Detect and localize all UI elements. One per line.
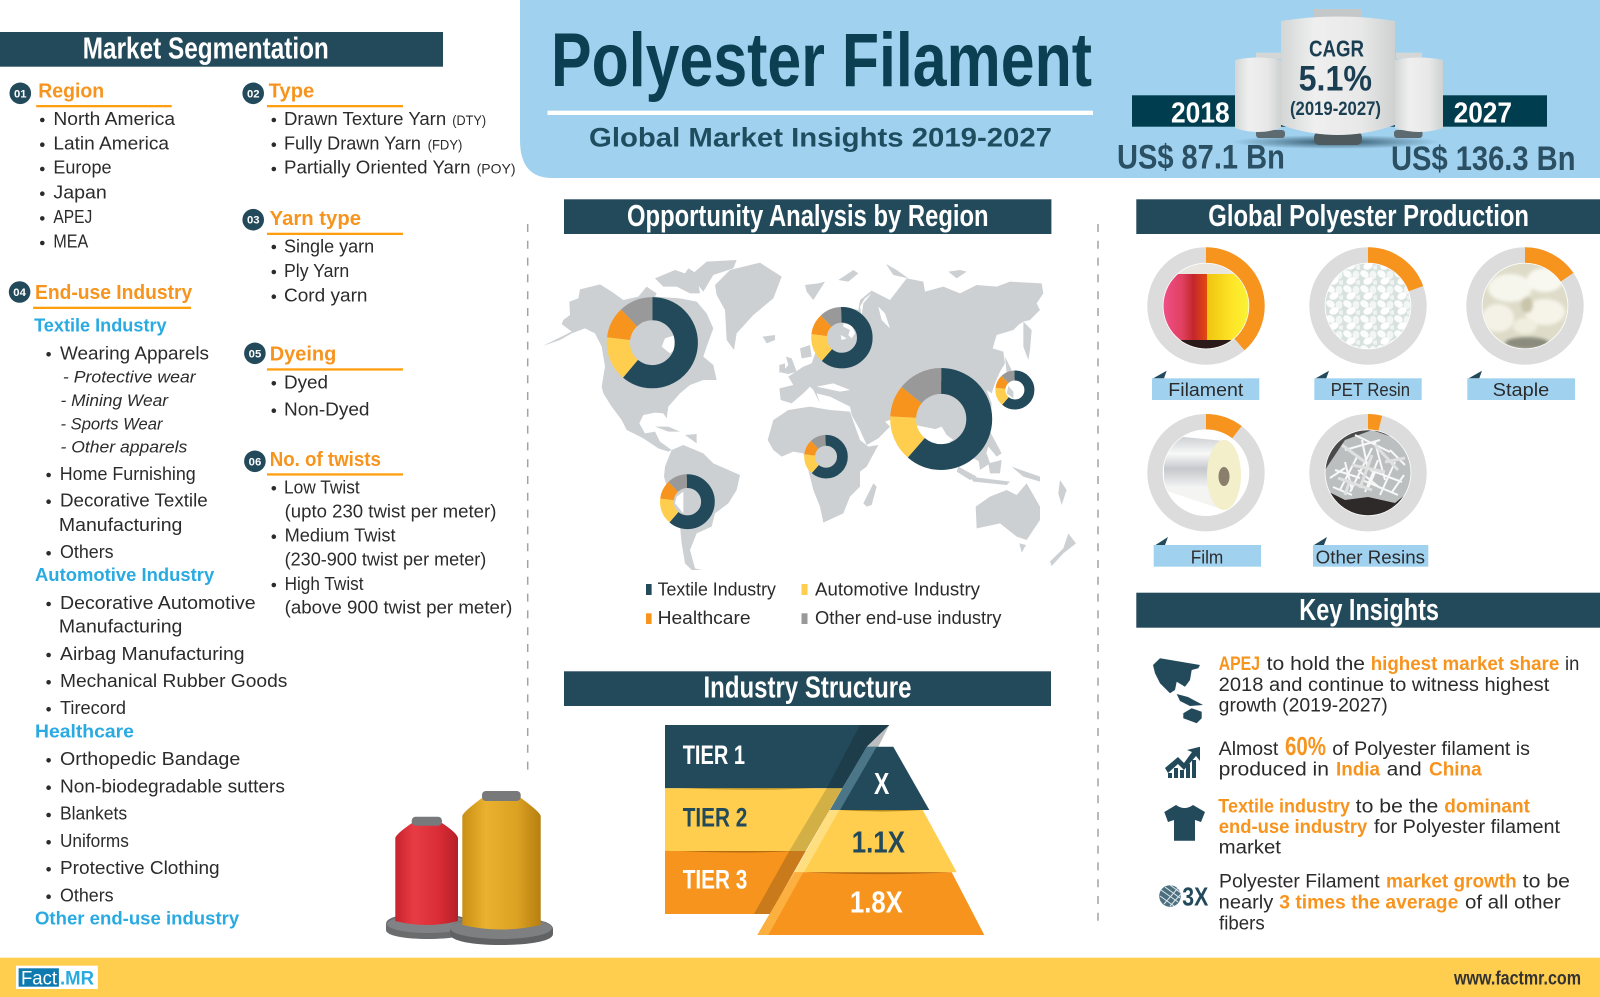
tier pyramid: 1.8X	[850, 884, 903, 919]
logo: Fact.MR: Fact	[21, 968, 58, 990]
segment 04: end-use industry: Non-biodegradable sutters	[60, 776, 285, 796]
segment 04: end-use industry: Tirecord	[60, 698, 126, 718]
segment 04: end-use industry: Blankets	[60, 804, 127, 824]
logo: Fact.MR	[16, 966, 98, 990]
tier pyramid: TIER 1	[683, 740, 745, 770]
insight: India and China production: produced in	[1219, 759, 1329, 780]
insight: India and China production: India	[1336, 759, 1380, 780]
insight: India and China production: and	[1387, 759, 1422, 780]
white yarn spools with CAGR: 5.1%	[1299, 60, 1372, 99]
insight: India and China production: of Polyester filament is	[1332, 739, 1530, 760]
segment 02: type	[242, 80, 516, 178]
heading: key insights	[1136, 592, 1600, 628]
insight: India and China production: Almost	[1219, 739, 1279, 760]
segment 03: yarn type: Yarn type	[270, 208, 361, 230]
segment 04: end-use industry: - Sports Wear	[60, 415, 164, 433]
segment 05: dyeing	[244, 342, 403, 420]
segment 02: type: Fully Drawn Yarn	[284, 134, 421, 154]
segment 05: dyeing: Dyeing	[270, 344, 336, 366]
insight: 3X market growth: to be	[1523, 872, 1570, 893]
icon: growth chart	[1165, 747, 1200, 778]
donut: APEJ	[903, 381, 979, 457]
insight: textile end use: to be the	[1356, 796, 1438, 817]
segment 01: region: 01	[14, 88, 27, 100]
segment 06: number of twists: (above 900 twist per meter)	[285, 597, 512, 617]
segment 01: region: Europe	[53, 158, 112, 178]
map legend: Automotive Industry	[815, 580, 980, 600]
footer band	[0, 958, 1600, 997]
segment 05: dyeing: Dyed	[284, 372, 328, 392]
white yarn spools with CAGR: CAGR	[1309, 36, 1364, 62]
segment 04: end-use industry: - Protective wear	[63, 369, 197, 387]
segment 04: end-use industry: Uniforms	[60, 831, 129, 851]
insight: 3X market growth: market growth	[1386, 872, 1517, 893]
map legend: Healthcare	[658, 608, 751, 628]
segment 04: end-use industry	[9, 281, 287, 929]
insight: textile end use: Textile industry	[1218, 796, 1350, 817]
segment 04: end-use industry: Manufacturing	[59, 515, 182, 535]
segment 04: end-use industry: Healthcare	[35, 720, 134, 741]
segment 05: dyeing: 05	[249, 348, 261, 360]
insight: 3X market growth: Polyester Filament	[1219, 872, 1380, 893]
insight: APEJ market share: 2018 and continue to witness highest	[1219, 675, 1550, 696]
donut: Europe	[819, 315, 865, 361]
panel: market segmentation heading: Market Segmentation	[83, 30, 329, 65]
insight: 3X market growth	[1159, 872, 1570, 934]
segment 06: number of twists: Low Twist	[284, 477, 360, 497]
segment 01: region: APEJ	[53, 207, 92, 227]
segment 02: type: Partially Oriented Yarn	[284, 158, 471, 178]
website url: www.factmr.com	[1453, 968, 1581, 989]
segment 04: end-use industry: 04	[13, 287, 27, 299]
icon: yarn ball with 3X	[1159, 882, 1209, 912]
segment 01: region: MEA	[53, 232, 88, 252]
segment 04: end-use industry: Others	[60, 542, 114, 562]
insight: APEJ market share: in	[1565, 654, 1579, 675]
insight: 3X market growth: of all other	[1465, 893, 1561, 914]
insight: textile end use	[1164, 796, 1561, 859]
segment 02: type: (FDY)	[428, 137, 462, 153]
heading: industry structure: Industry Structure	[704, 670, 912, 705]
insight: India and China production: 60%	[1285, 731, 1326, 761]
segment 01: region: North America	[53, 109, 176, 129]
insight: textile end use: market	[1219, 838, 1282, 859]
donut: Japan	[1000, 376, 1029, 404]
segment 01: region: Latin America	[53, 134, 170, 154]
world map with regional donuts	[543, 260, 1076, 570]
icon: yarn ball with 3X: 3X	[1182, 882, 1209, 912]
donut: Middle East and Africa	[810, 440, 842, 473]
segment 01: region: Region	[38, 80, 104, 102]
insight: textile end use: end-use industry	[1219, 817, 1368, 838]
icon: t-shirt	[1164, 805, 1205, 841]
segment 02: type: 02	[247, 88, 260, 100]
production ring: film	[1154, 422, 1261, 567]
production ring: other resins	[1313, 422, 1428, 567]
heading: industry structure	[564, 670, 1051, 706]
insight: India and China production	[1165, 731, 1530, 780]
segment 03: yarn type: Cord yarn	[284, 286, 368, 306]
production ring: filament	[1152, 255, 1259, 400]
year ribbon	[1132, 95, 1547, 129]
segment 06: number of twists: Medium Twist	[285, 526, 396, 546]
map legend: Other end-use industry	[815, 608, 1001, 628]
segment 03: yarn type	[242, 208, 403, 306]
segment 04: end-use industry: Decorative Automotive	[60, 593, 256, 613]
tier pyramid	[665, 725, 984, 935]
segment 03: yarn type: Ply Yarn	[284, 261, 349, 281]
panel: market segmentation heading	[0, 30, 443, 67]
market value 2018: US$ 87.1 Bn	[1117, 138, 1285, 176]
insight: 3X market growth: fibers	[1219, 913, 1265, 934]
insight: APEJ market share	[1153, 654, 1579, 723]
insight: APEJ market share: highest market share	[1371, 654, 1559, 675]
segment 04: end-use industry: Other end-use industry	[35, 908, 240, 929]
segment 04: end-use industry: Manufacturing	[59, 617, 182, 637]
segment 02: type: Type	[269, 80, 314, 102]
segment 03: yarn type: Single yarn	[284, 236, 374, 256]
segment 04: end-use industry: Decorative Textile	[60, 491, 208, 511]
segment 04: end-use industry: Airbag Manufacturing	[60, 644, 245, 664]
year ribbon: 2018	[1171, 97, 1230, 129]
segment 03: yarn type: 03	[247, 215, 260, 227]
map legend: Textile Industry	[658, 580, 776, 600]
white yarn spools with CAGR: (2019-2027)	[1290, 99, 1381, 120]
tier pyramid: 1.1X	[852, 825, 905, 860]
segment 05: dyeing: Non-Dyed	[284, 400, 370, 420]
segment 02: type: (POY)	[477, 161, 516, 177]
segment 01: region	[9, 80, 176, 252]
segment 04: end-use industry: Orthopedic Bandage	[60, 749, 240, 769]
icon: thread spools	[386, 791, 553, 945]
insight: textile end use: for Polyester filament	[1374, 817, 1561, 838]
tier pyramid: TIER 3	[683, 864, 747, 894]
insight: APEJ market share: APEJ	[1219, 654, 1260, 675]
segment 04: end-use industry: Mechanical Rubber Goods	[60, 671, 287, 691]
heading: key insights: Key Insights	[1299, 592, 1439, 627]
insight: APEJ market share: growth (2019-2027)	[1219, 696, 1388, 717]
segment 04: end-use industry: - Other apparels	[60, 439, 187, 457]
production ring: filament: Filament	[1168, 379, 1243, 400]
market value 2027: US$ 136.3 Bn	[1391, 140, 1576, 178]
segment 04: end-use industry: - Mining Wear	[60, 392, 170, 410]
segment 02: type: (DTY)	[452, 112, 486, 128]
header band	[520, 0, 1600, 178]
segment 06: number of twists: High Twist	[285, 574, 364, 594]
heading: opportunity analysis: Opportunity Analysis by Region	[627, 198, 989, 233]
segment 06: number of twists: (upto 230 twist per meter)	[285, 501, 496, 521]
insight: 3X market growth: nearly	[1219, 893, 1274, 914]
production ring: staple	[1467, 255, 1576, 400]
segment 02: type: Drawn Texture Yarn	[284, 109, 446, 129]
insight: textile end use: dominant	[1444, 796, 1531, 817]
donut: North America	[618, 309, 686, 377]
production ring: other resins: Other Resins	[1316, 546, 1425, 567]
segment 06: number of twists	[244, 449, 512, 617]
insight: India and China production: China	[1429, 759, 1482, 780]
production ring: PET resin: PET Resin	[1331, 379, 1410, 400]
production ring: film: Film	[1191, 546, 1223, 567]
tier pyramid: TIER 2	[683, 803, 747, 833]
white yarn spools with CAGR	[1231, 9, 1443, 149]
icon: Asia Pacific map	[1153, 658, 1203, 723]
main title: Polyester Filament	[551, 18, 1092, 103]
segment 04: end-use industry: Textile Industry	[34, 315, 167, 336]
segment 06: number of twists: No. of twists	[270, 449, 381, 471]
insight: APEJ market share: to hold the	[1267, 654, 1365, 675]
tier pyramid: X	[874, 766, 890, 801]
production ring: PET resin	[1314, 255, 1422, 400]
segment 06: number of twists: 06	[249, 456, 261, 468]
segment 04: end-use industry: Automotive Industry	[35, 564, 215, 585]
segment 04: end-use industry: Others	[60, 885, 114, 905]
segment 06: number of twists: (230-900 twist per meter)	[285, 550, 486, 570]
year ribbon: 2027	[1454, 97, 1512, 129]
insight: 3X market growth: 3 times the average	[1279, 893, 1458, 914]
map legend	[646, 580, 1001, 628]
segment 04: end-use industry: Wearing Apparels	[60, 343, 209, 363]
segment 01: region: Japan	[53, 182, 107, 202]
segment 04: end-use industry: End-use Industry	[35, 282, 193, 304]
segment 04: end-use industry: Protective Clothing	[60, 858, 220, 878]
segment 04: end-use industry: Home Furnishing	[60, 464, 196, 484]
subtitle: Global Market Insights 2019-2027	[589, 123, 1052, 153]
production ring: staple: Staple	[1493, 379, 1549, 400]
logo: Fact.MR: .MR	[60, 968, 94, 990]
donut: Latin America	[667, 481, 708, 522]
